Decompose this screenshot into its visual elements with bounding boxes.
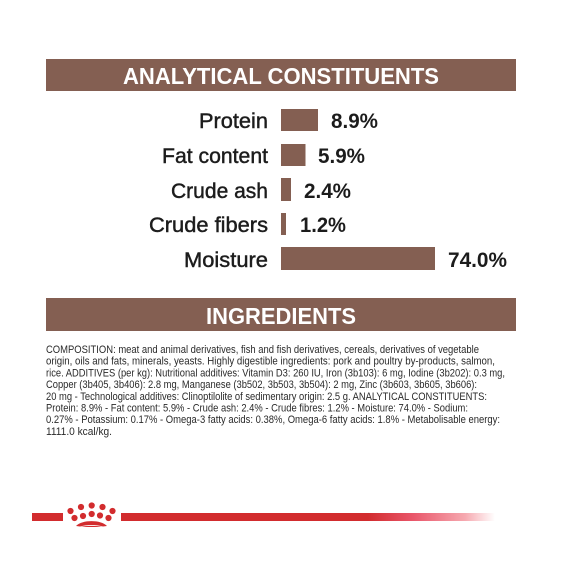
row: moisture [184, 247, 507, 272]
icon: crown [67, 502, 116, 527]
row: fat content: Fat content [162, 144, 268, 168]
text block: composition: 0.27% - Potassium: 0.17% - Omega-3 fatty acids: 0.38%, Omega-6 fatty acids: 1.8% - Metabolisable energy: [46, 414, 500, 426]
panel: ingredients header: INGREDIENTS [206, 303, 356, 329]
logo: red crown band [32, 502, 495, 527]
row: moisture: Moisture [184, 248, 268, 272]
row: crude ash: Crude ash [171, 179, 268, 203]
row: protein [199, 109, 378, 133]
panel: analytical constituents header [46, 59, 516, 91]
text block: composition: COMPOSITION: meat and animal derivatives, fish and fish derivatives, cereals, derivatives of vegetable [46, 344, 479, 356]
bar chart: analytical constituents [149, 109, 507, 272]
text block: composition: Protein: 8.9% - Fat content: 5.9% - Crude ash: 2.4% - Crude fibres: 1.2% - Moisture: 74.0% - Sodium: [46, 402, 468, 414]
text block: composition: 20 mg - Technological additives: Clinoptilolite of sedimentary origin: 2.5 g. ANALYTICAL CONSTITUENTS: [46, 391, 487, 403]
row: crude ash [171, 178, 351, 203]
row: protein: Protein [199, 109, 268, 133]
text block: composition: origin, oils and fats, minerals, yeasts. Highly digestible ingredients: pork and poultry by-products, salmon, [46, 356, 495, 368]
text block: composition: 1111.0 kcal/kg. [46, 426, 112, 438]
panel: analytical constituents header: ANALYTICAL CONSTITUENTS [123, 63, 439, 89]
text block: composition [46, 344, 505, 438]
row: crude fibers: 1.2% [300, 213, 346, 237]
row: protein: 8.9% [331, 109, 378, 133]
row: fat content: 5.9% [318, 144, 365, 168]
row: moisture: 74.0% [448, 248, 507, 272]
text block: composition: Copper (3b405, 3b406): 2.8 mg, Manganese (3b502, 3b503, 3b504): 2 mg, Zinc (3b603, 3b605, 3b606): [46, 379, 477, 391]
row: crude ash: 2.4% [304, 179, 351, 203]
panel: ingredients header [46, 298, 516, 331]
row: fat content [162, 144, 365, 168]
text block: composition: rice. ADDITIVES (per kg): Nutritional additives: Vitamin D3: 260 IU, Iron (3b103): 6 mg, Iodine (3b202): 0.3 mg, [46, 367, 505, 379]
row: crude fibers [149, 213, 346, 237]
row: crude fibers: Crude fibers [149, 213, 268, 237]
